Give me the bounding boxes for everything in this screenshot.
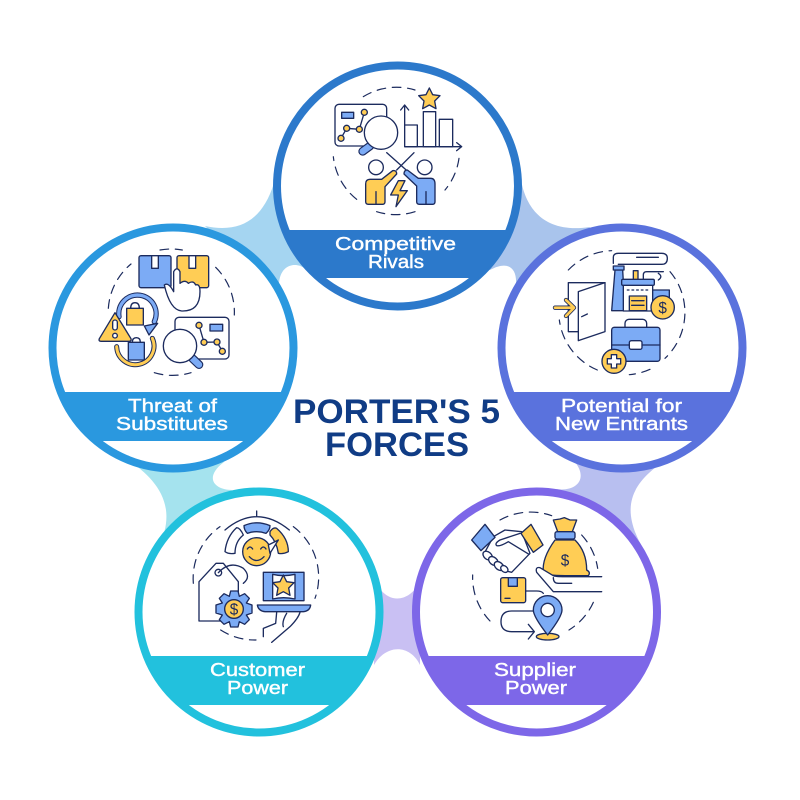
label: competitive rivals [335,234,456,272]
panel: threat of substitutes [45,228,300,468]
icon: substitute products [99,249,234,375]
icon: customer satisfaction [193,511,319,642]
connector: new entrants to supplier [556,450,668,550]
label: new entrants: New Entrants [555,414,688,434]
title [293,393,500,464]
title: PORTER'S 5 [293,393,500,431]
banner: threat of substitutes [65,392,281,441]
label: supplier power [494,660,576,698]
label: new entrants: Potential for [561,396,682,416]
connector: rivals to new entrants [470,180,590,284]
banner: new entrants [514,392,730,441]
connector: customer to supplier [374,582,420,665]
banner: customer power [151,656,367,705]
label: competitive rivals: Competitive [335,234,456,254]
label: competitive rivals: Rivals [368,252,424,272]
icon: customer satisfaction: $ [230,601,239,618]
label: threat of substitutes: Threat of [128,396,218,416]
panel: new entrants [495,228,750,468]
title: FORCES [325,426,469,464]
connector: substitutes to rivals [205,183,320,284]
label: threat of substitutes [116,396,228,434]
connector: substitutes to customer [128,450,232,548]
label: supplier power: Supplier [494,660,576,680]
icon: new market entry: $ [658,300,667,317]
label: new entrants [555,396,688,434]
label: customer power [210,660,305,698]
icon: supplier deal: $ [561,553,570,570]
label: customer power: Customer [210,660,305,680]
panel: supplier power [408,492,665,732]
label: supplier power: Power [505,678,567,698]
icon: supplier deal [472,512,602,640]
panel: competitive rivals [270,66,525,306]
label: customer power: Power [227,678,288,698]
icon: rivals analysis [333,87,462,215]
banner: supplier power [428,656,644,705]
banner: competitive rivals [290,230,506,278]
label: threat of substitutes: Substitutes [116,414,228,434]
panel: customer power [130,492,385,732]
icon: new market entry [555,251,685,375]
